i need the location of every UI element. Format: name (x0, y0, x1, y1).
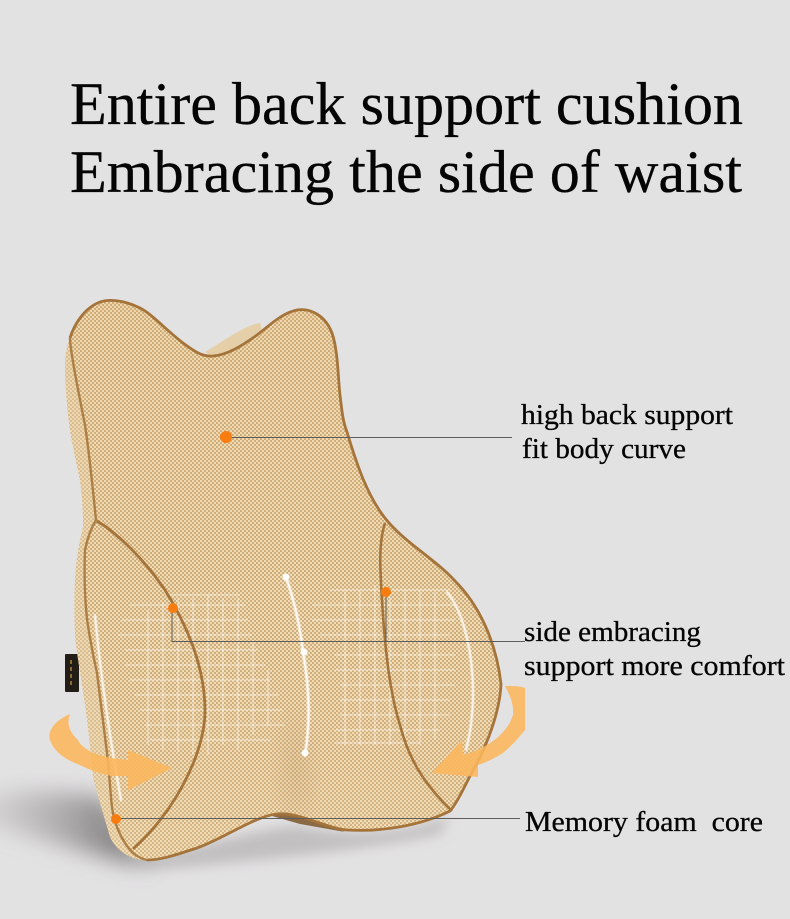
arrow: right (432, 686, 525, 777)
cushion (60, 295, 505, 865)
left seam (97, 521, 205, 849)
label: high back support (521, 400, 733, 465)
right seam (380, 523, 452, 811)
cushion shadow (0, 791, 450, 870)
orange marker dots (111, 431, 391, 824)
label: side embracing: support more comfort (524, 651, 785, 682)
dark strip under cushion (265, 813, 345, 832)
white sparkle dots (282, 574, 308, 756)
back panel behind notch (205, 323, 261, 358)
title: Embracing the side of waist (70, 139, 742, 205)
arrow: left (49, 714, 172, 790)
label: high back support: fit body curve (522, 434, 686, 465)
white grid lines left (118, 595, 285, 755)
leader lines (116, 438, 525, 818)
title: Entire back support cushion (70, 71, 743, 137)
label: memory foam core: Memory foam core (525, 807, 763, 838)
piping left edge (70, 338, 147, 860)
label: side embracing (524, 617, 785, 682)
cushion body (65, 300, 501, 860)
label: side embracing: side embracing (524, 617, 701, 648)
white grid lines right (312, 585, 455, 745)
label: high back support: high back support (521, 400, 733, 431)
piping outline (70, 300, 501, 860)
white highlight curves (95, 577, 473, 800)
cushion shading (65, 302, 448, 860)
title (70, 71, 743, 205)
brand tag (65, 654, 79, 692)
